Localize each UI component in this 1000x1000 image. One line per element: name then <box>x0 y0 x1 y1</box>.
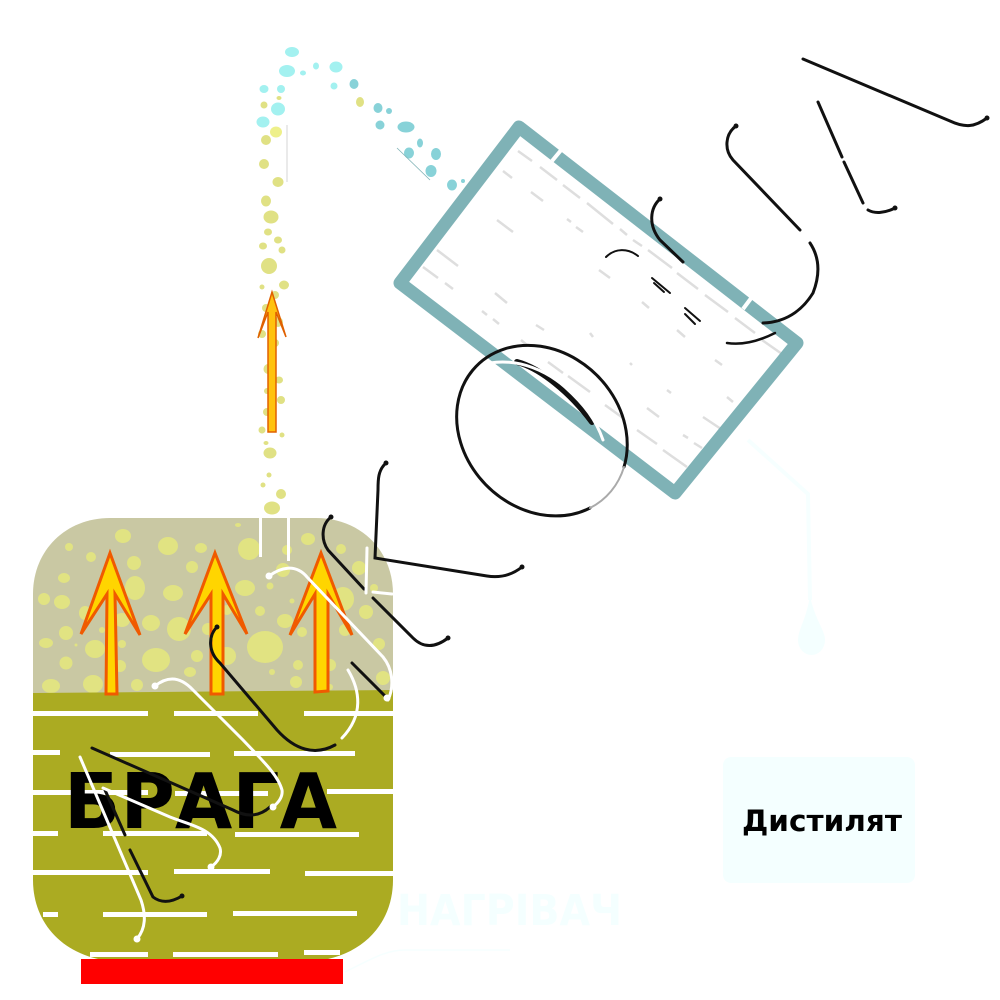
watermark: white handwritten strokes <box>80 362 603 941</box>
icon: distillate drop <box>798 596 825 655</box>
watermark: black handwritten strokes <box>92 59 990 901</box>
vessel foam layer <box>33 518 393 962</box>
heater bar <box>81 959 343 984</box>
label: distillate text: Дистилят <box>742 804 902 838</box>
label: heater text (pale) <box>345 886 622 972</box>
letter O ellipse <box>457 345 627 516</box>
label panel: distillate <box>723 757 915 883</box>
panel: condenser <box>400 127 797 493</box>
label: heater text (pale): НАГРІВАЧ <box>397 886 622 936</box>
arrow: rising vapour centre <box>185 553 247 694</box>
arrow: rising vapour right <box>290 553 352 692</box>
arrow: rising vapour left <box>81 553 140 694</box>
panel: distillate output faint tube and drop <box>748 440 825 655</box>
liquid white ripple lines <box>33 711 393 957</box>
liquid layer <box>33 690 393 962</box>
cyan droplets <box>256 47 342 128</box>
condenser coolant dashes <box>423 151 782 467</box>
vapour droplets rising <box>256 47 364 514</box>
arrow: vapour rising to condenser <box>258 292 286 432</box>
vapour outlet white lines <box>259 518 290 561</box>
condenser frame gaps <box>552 149 752 309</box>
condenser frame <box>400 127 797 493</box>
foam bubbles <box>38 523 390 693</box>
panel: fermenting wash vessel <box>33 518 393 962</box>
label: wash text: БРАГА <box>64 758 337 847</box>
teal droplets entering condenser <box>287 79 465 190</box>
